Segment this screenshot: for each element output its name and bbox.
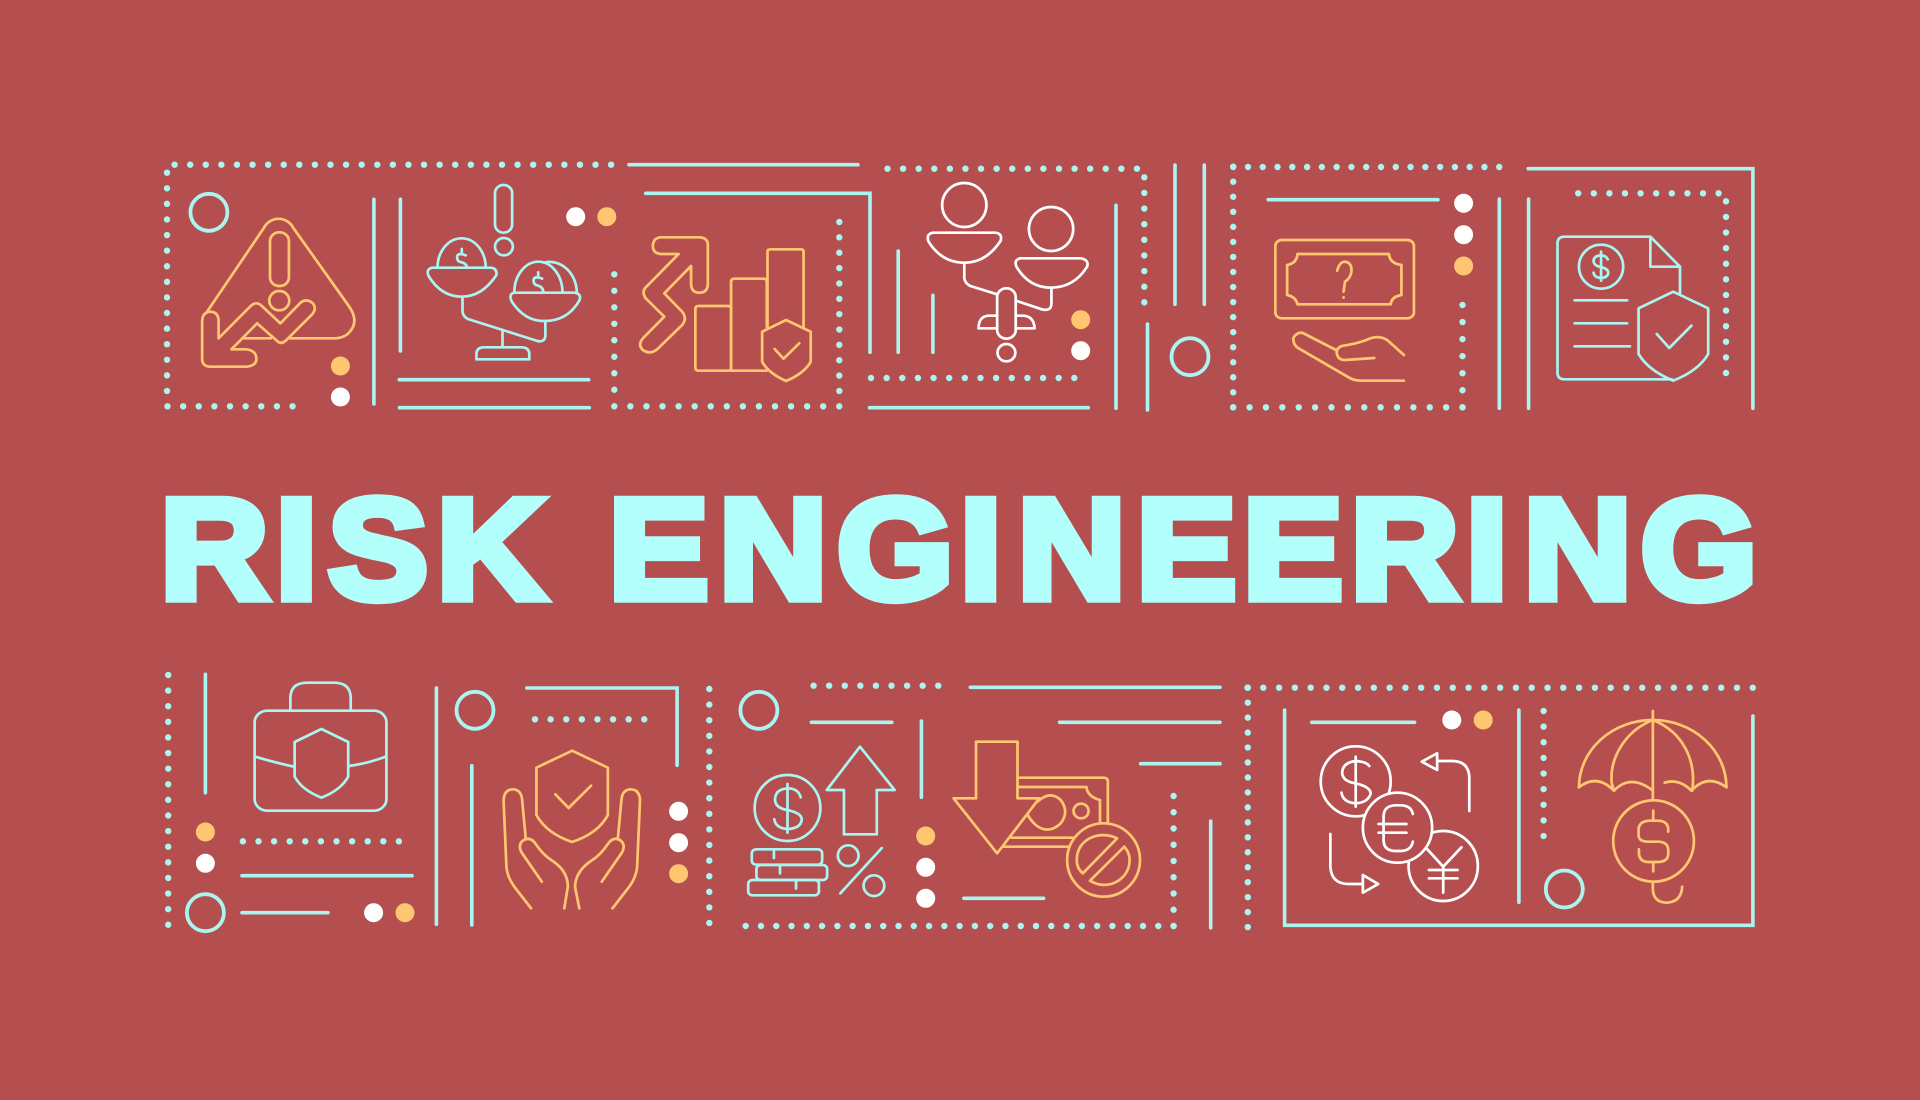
icon: dollar coin, coin stack, up arrow and percent <box>748 747 895 896</box>
icon: currency exchange coins with arrows <box>1321 746 1478 901</box>
icon: people on balance scale <box>928 183 1088 361</box>
icon: down arrow over banknote with prohibition sign <box>954 742 1140 897</box>
title: RISK ENGINEERING <box>160 470 1757 629</box>
icon: hands holding shield <box>504 751 640 908</box>
icon: umbrella over dollar coin <box>1579 711 1726 903</box>
icon: warning triangle with falling arrow <box>202 219 354 367</box>
icon: briefcase with shield <box>255 683 386 811</box>
icon: financial document with shield <box>1557 237 1708 381</box>
icon: growth chart with arrow and shield <box>640 237 811 381</box>
icon: banknote with question mark on open hand <box>1275 240 1414 381</box>
icon: money balance scale with exclamation mark <box>428 185 580 359</box>
